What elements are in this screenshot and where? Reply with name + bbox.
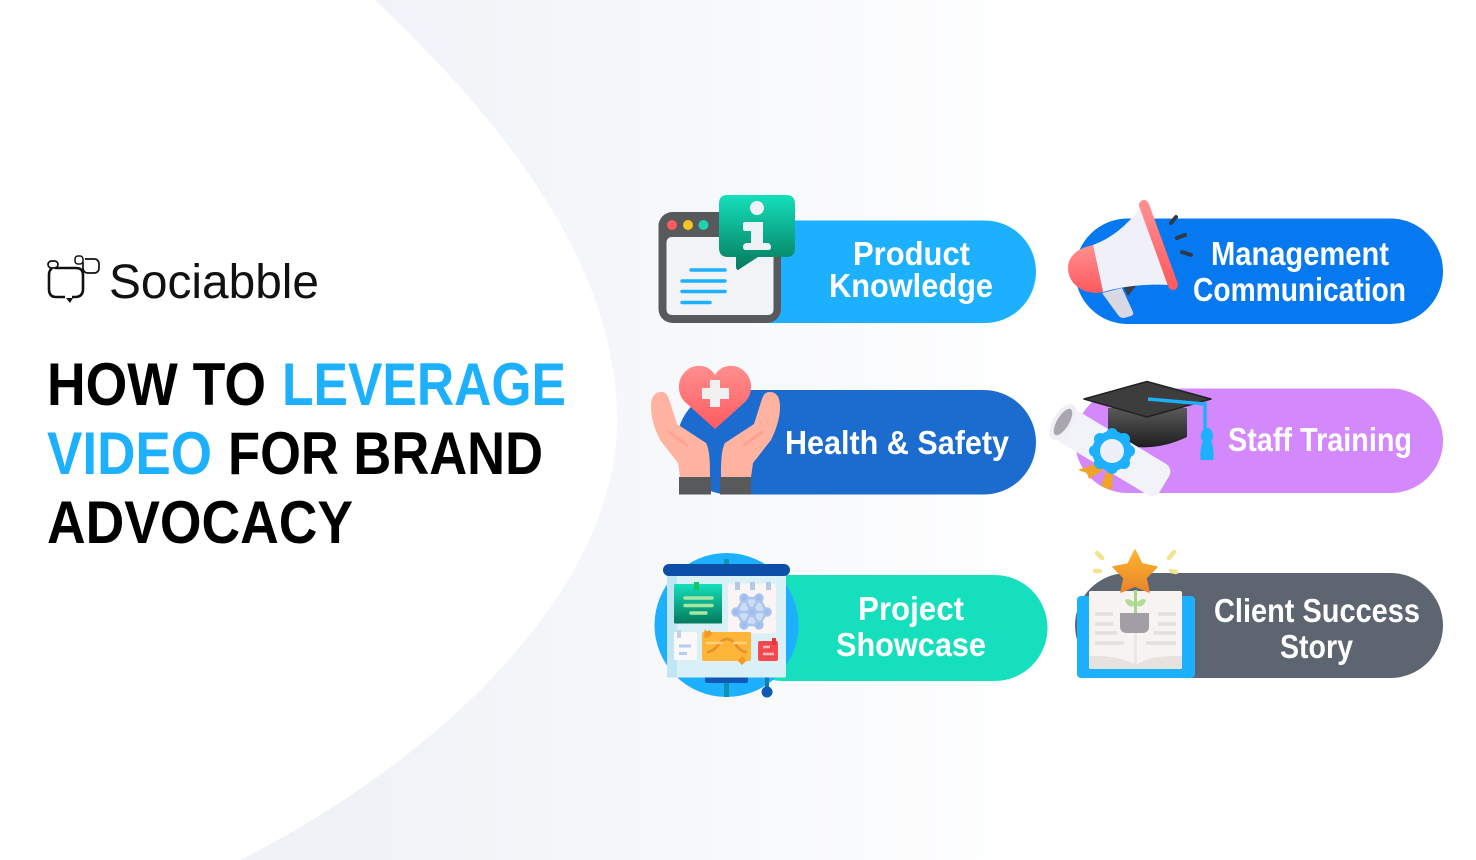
- pill: [700, 220, 1036, 323]
- label: Management: [1211, 235, 1389, 272]
- label: Communication: [1193, 271, 1406, 308]
- icon: presentation board: [654, 553, 798, 698]
- icon: browser window with info bubble: [658, 195, 795, 323]
- label: [1193, 235, 1406, 308]
- label: Client Success: [1214, 592, 1420, 629]
- icon: megaphone: [1068, 205, 1191, 318]
- label: [1214, 592, 1420, 665]
- title: VIDEO: [47, 420, 212, 487]
- panel: Health & Safety: [651, 366, 1036, 494]
- icon: book with plant and star: [1077, 550, 1195, 678]
- icon: hands holding heart: [651, 366, 780, 494]
- white curved panel: [0, 0, 617, 860]
- label: Staff Training: [1228, 421, 1412, 458]
- panel: Product Knowledge: [658, 195, 1036, 323]
- wordmark: Sociabble: [109, 256, 319, 309]
- logo: Sociabble: [48, 256, 319, 309]
- pill: [1075, 573, 1443, 678]
- pill: [677, 390, 1036, 494]
- label: Knowledge: [829, 267, 993, 304]
- pill: [1075, 218, 1443, 324]
- pill: [730, 575, 1048, 681]
- title: [47, 351, 566, 556]
- label: [836, 590, 986, 663]
- icon: speech bubbles: [48, 256, 99, 303]
- title: LEVERAGE: [282, 351, 566, 418]
- label: Showcase: [836, 626, 986, 663]
- panel: Staff Training: [1044, 382, 1443, 499]
- pill: [1075, 388, 1443, 493]
- label: Project: [858, 590, 964, 627]
- label: Product: [853, 235, 970, 272]
- title: FOR BRAND: [228, 420, 543, 487]
- label: Story: [1280, 628, 1354, 665]
- icon: graduation cap and diploma: [1044, 382, 1214, 499]
- panel: Management Communication: [1068, 205, 1443, 324]
- label: Health & Safety: [785, 424, 1010, 461]
- panel: Client Success Story: [1075, 550, 1443, 678]
- label: [829, 235, 993, 304]
- title: ADVOCACY: [47, 489, 353, 556]
- title: HOW TO: [47, 351, 266, 418]
- panel: Project Showcase: [654, 553, 1048, 698]
